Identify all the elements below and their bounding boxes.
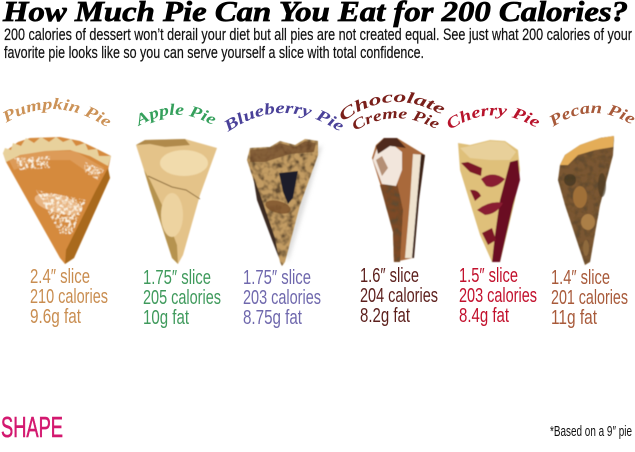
stats: cherry pie: 8.4g fat xyxy=(459,304,509,327)
stats: apple pie: 1.75″ slice xyxy=(143,266,211,289)
stats: blueberry pie xyxy=(243,266,321,329)
stats: blueberry pie: 8.75g fat xyxy=(243,306,302,329)
stats: chocolate creme pie: 1.6″ slice xyxy=(360,264,419,287)
panel: apple pie xyxy=(136,104,221,329)
stats: pecan pie: 1.4″ slice xyxy=(551,266,610,289)
panel: pecan pie xyxy=(550,104,634,329)
stats: apple pie: 10g fat xyxy=(143,306,189,329)
stats: chocolate creme pie xyxy=(360,264,438,327)
stats: blueberry pie: 1.75″ slice xyxy=(243,266,311,289)
panel: pumpkin pie xyxy=(2,98,112,328)
stats: chocolate creme pie: 8.2g fat xyxy=(360,304,410,327)
label: chocolate creme pie: Chocolate xyxy=(340,92,444,120)
label: cherry pie: Cherry Pie xyxy=(448,108,540,128)
stats: pecan pie: 11g fat xyxy=(551,306,597,329)
icon: pumpkin pie slice xyxy=(3,137,111,264)
label: pecan pie: Pecan Pie xyxy=(550,104,634,127)
stats: apple pie: 205 calories xyxy=(143,286,221,309)
stats: blueberry pie: 203 calories xyxy=(243,286,321,309)
panel: blueberry pie xyxy=(224,103,343,329)
icon: blueberry pie slice xyxy=(252,146,322,262)
icon: apple pie slice xyxy=(136,139,217,264)
logo: SHAPE: SHAPE xyxy=(1,412,63,444)
stats: pumpkin pie: 9.6g fat xyxy=(30,305,81,328)
stats: cherry pie: 1.5″ slice xyxy=(459,264,518,287)
stats: apple pie xyxy=(143,266,221,329)
intro text: favorite pie looks like so you can serve yourself a slice with total confidence. xyxy=(4,43,424,62)
label: blueberry pie: Blueberry Pie xyxy=(224,103,343,132)
stats: pumpkin pie: 2.4″ slice xyxy=(30,265,90,288)
label: chocolate creme pie: Creme Pie xyxy=(353,110,439,129)
label: apple pie: Apple Pie xyxy=(138,104,216,126)
icon: chocolate creme pie slice xyxy=(372,138,425,262)
stats: pecan pie xyxy=(551,266,628,329)
stats: pumpkin pie: 210 calories xyxy=(30,285,108,308)
icon: pecan pie slice xyxy=(558,136,614,265)
stats: chocolate creme pie: 204 calories xyxy=(360,284,438,307)
label: pumpkin pie: Pumpkin Pie xyxy=(2,98,110,126)
stats: cherry pie xyxy=(459,264,537,327)
stats: pumpkin pie xyxy=(30,265,108,328)
intro text xyxy=(4,25,632,62)
panel: cherry pie xyxy=(448,108,540,327)
icon: cherry pie slice xyxy=(458,140,520,262)
panel: chocolate creme pie xyxy=(340,92,444,327)
stats: cherry pie: 203 calories xyxy=(459,284,537,307)
